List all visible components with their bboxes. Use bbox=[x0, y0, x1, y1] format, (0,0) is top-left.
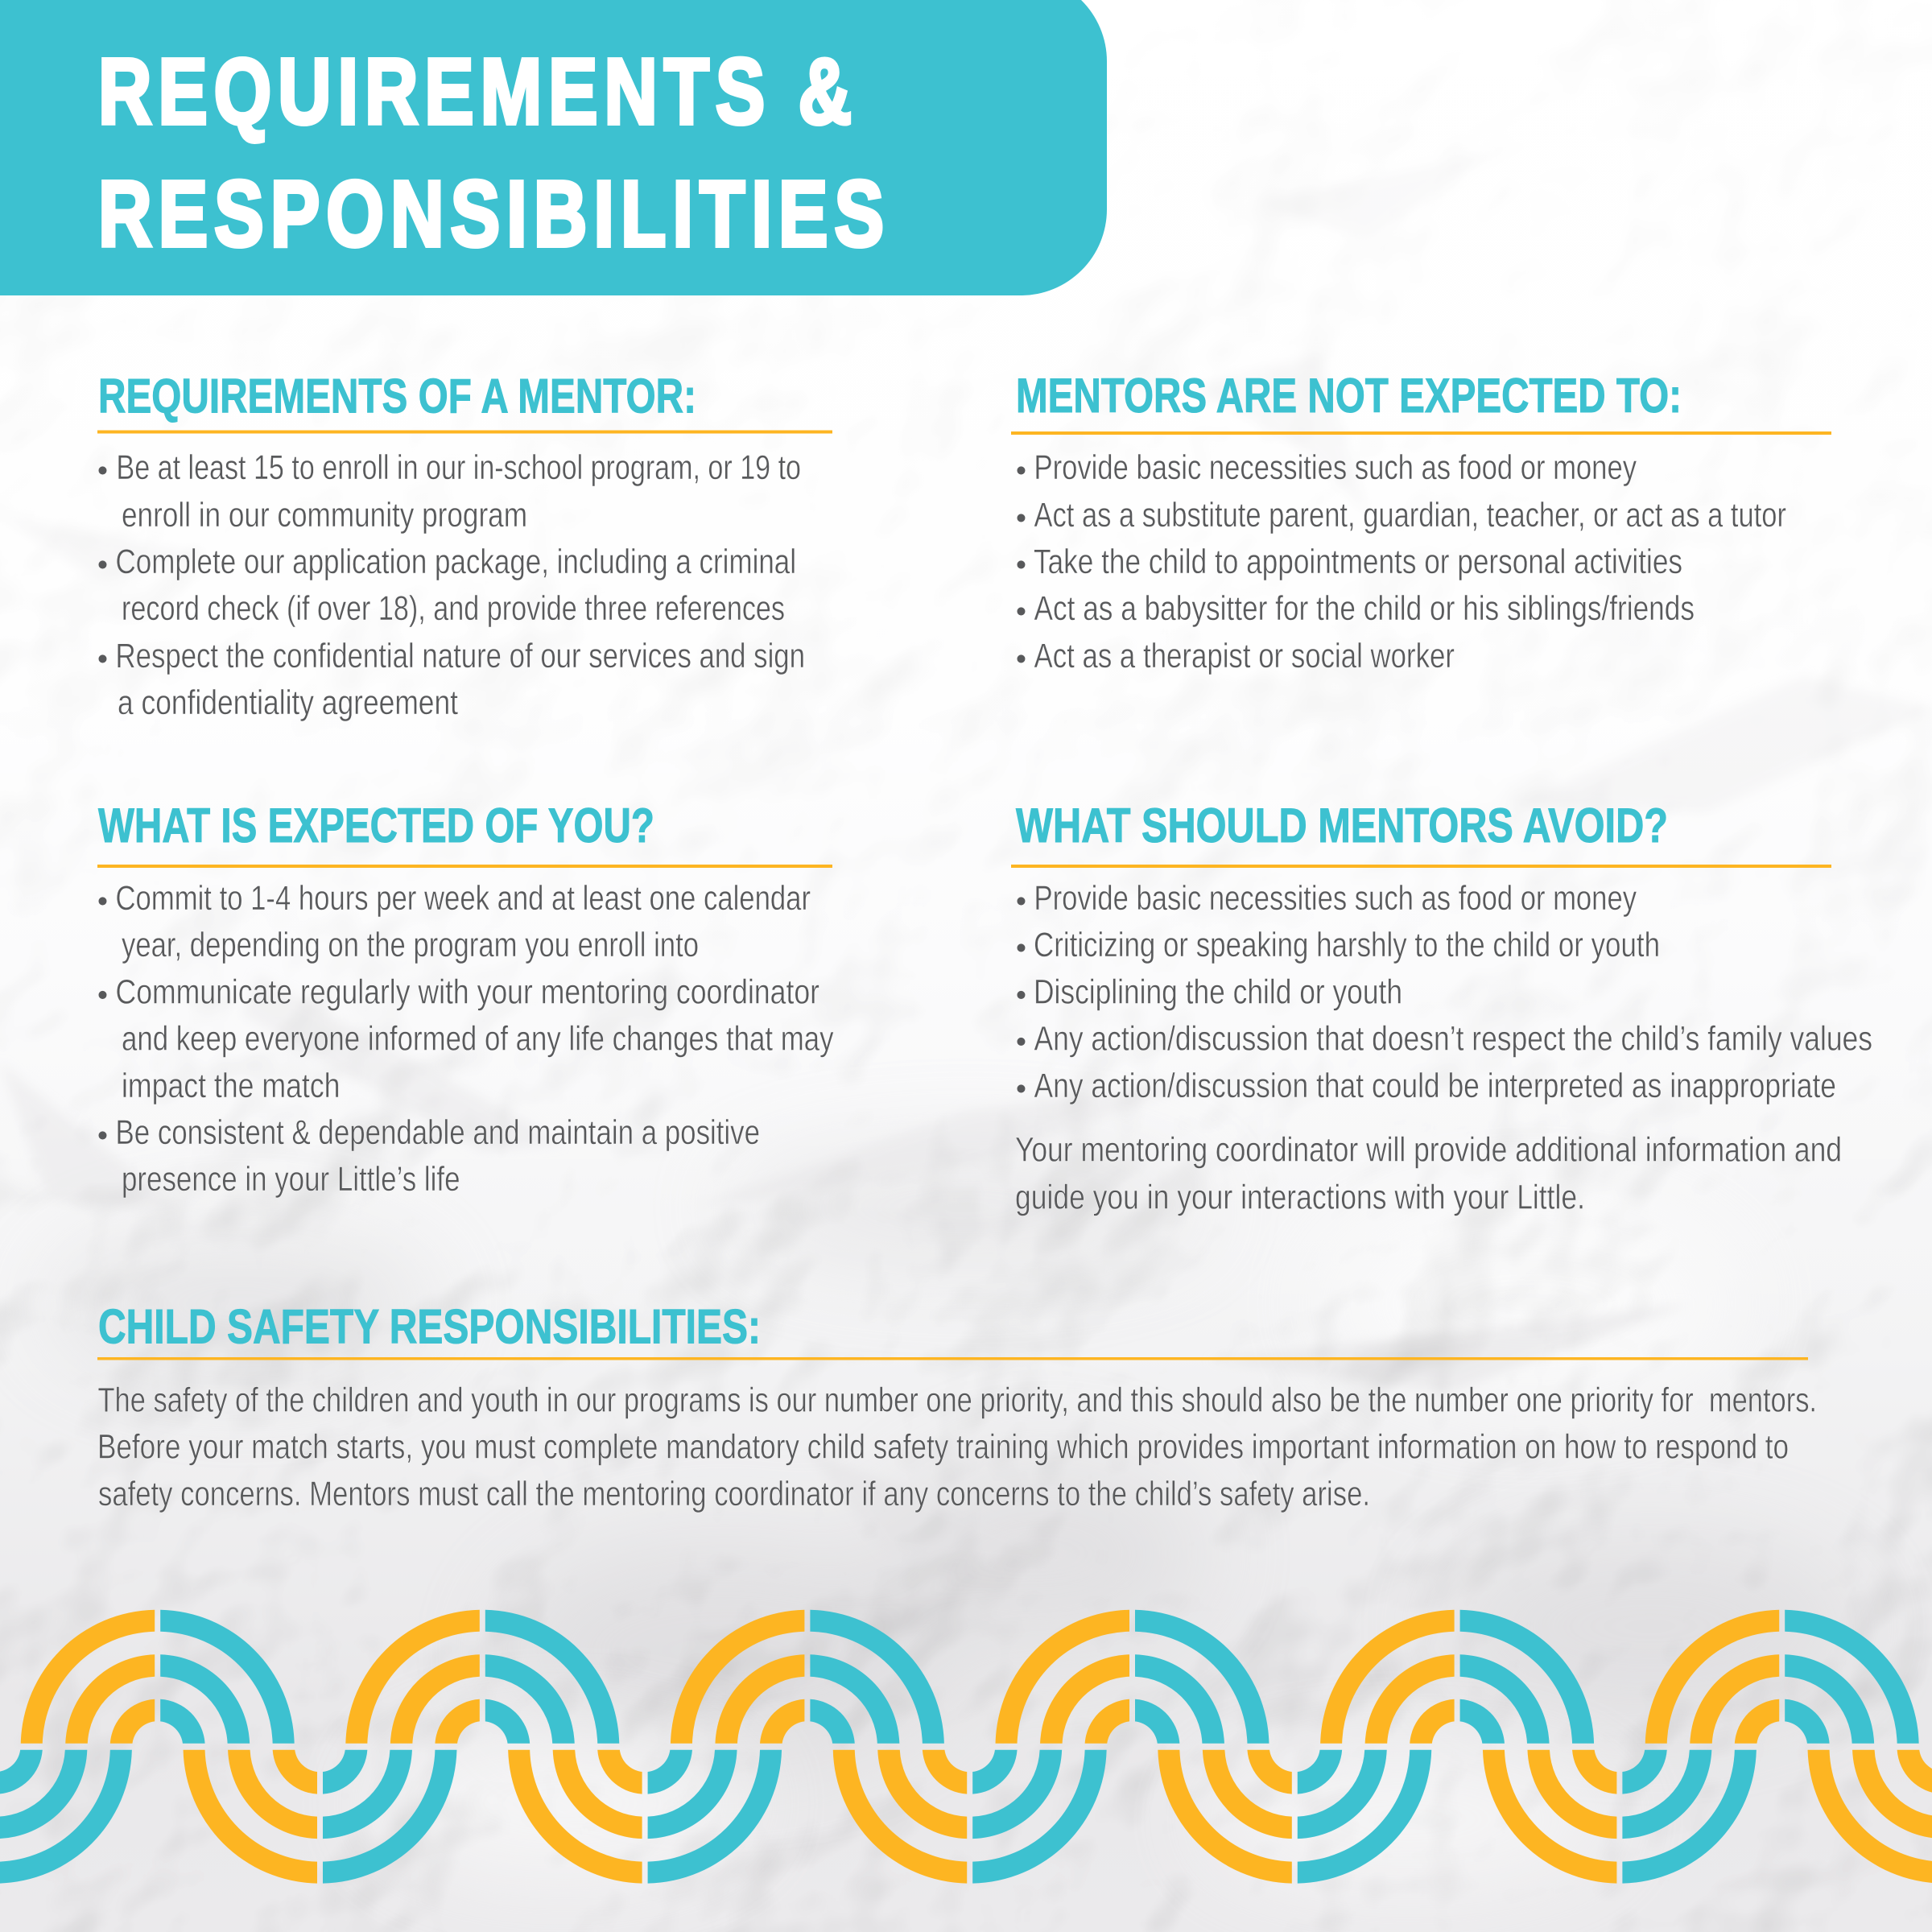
panel: what is expected of you bbox=[97, 799, 834, 1199]
list: not expected: • bbox=[1016, 454, 1026, 487]
list: mentor requirements: • bbox=[97, 454, 108, 487]
wave pattern: orange and teal arcs bbox=[0, 1610, 1932, 1884]
list: mentor requirements: Complete our application package, including a criminal bbox=[116, 543, 796, 581]
list: not expected: Act as a therapist or social worker bbox=[1034, 637, 1455, 675]
list: mentor requirements: Be at least 15 to enroll in our in-school program, or 19 to bbox=[116, 448, 801, 487]
closing note: guide you in your interactions with your Little. bbox=[1015, 1179, 1585, 1217]
list: things to avoid: Provide basic necessities such as food or money bbox=[1034, 879, 1637, 918]
list: mentor requirements: record check (if over 18), and provide three references bbox=[122, 589, 785, 628]
list: not expected: Provide basic necessities such as food or money bbox=[1034, 448, 1637, 487]
list: not expected: Take the child to appointments or personal activities bbox=[1034, 543, 1682, 581]
list: expectations bbox=[97, 879, 834, 1199]
list: expectations: presence in your Little’s life bbox=[122, 1160, 460, 1199]
panel: mentors are not expected to bbox=[1011, 369, 1831, 675]
list: expectations: • bbox=[97, 979, 108, 1011]
list: mentor requirements: a confidentiality agreement bbox=[118, 683, 458, 722]
heading: mentors are not expected to: MENTORS ARE NOT EXPECTED TO: bbox=[1016, 369, 1682, 423]
heading: what is expected of you: WHAT IS EXPECTED OF YOU? bbox=[98, 799, 654, 852]
list: things to avoid: • bbox=[1016, 931, 1026, 964]
panel: child safety responsibilities bbox=[97, 1299, 1817, 1513]
panel: what should mentors avoid bbox=[1011, 799, 1872, 1217]
heading: what should mentors avoid: WHAT SHOULD MENTORS AVOID? bbox=[1016, 799, 1668, 852]
paragraph: child safety bbox=[97, 1381, 1817, 1513]
list: mentor requirements: • bbox=[97, 642, 108, 675]
list: not expected: Act as a babysitter for the child or his siblings/friends bbox=[1034, 589, 1695, 628]
list: not expected: • bbox=[1016, 502, 1026, 535]
list: not expected: • bbox=[1016, 595, 1026, 628]
list: expectations: Communicate regularly with your mentoring coordinator bbox=[116, 972, 819, 1011]
panel: requirements of a mentor bbox=[97, 369, 832, 722]
heading: child safety responsibilities: CHILD SAFETY RESPONSIBILITIES: bbox=[98, 1299, 761, 1354]
list: things to avoid: Criticizing or speaking harshly to the child or youth bbox=[1034, 926, 1660, 964]
heading: requirements of a mentor: REQUIREMENTS OF A MENTOR: bbox=[98, 369, 696, 423]
list: mentor requirements: enroll in our community program bbox=[122, 496, 527, 535]
title bbox=[98, 39, 890, 266]
list: things to avoid: • bbox=[1016, 979, 1026, 1011]
list: expectations: and keep everyone informed of any life changes that may bbox=[122, 1019, 834, 1058]
paragraph: child safety: safety concerns. Mentors must call the mentoring coordinator if any concerns to the child’s safety arise. bbox=[98, 1475, 1370, 1513]
list: expectations: Commit to 1-4 hours per week and at least one calendar bbox=[116, 879, 811, 918]
list: mentor requirements: Respect the confidential nature of our services and sign bbox=[116, 637, 805, 675]
closing note bbox=[1015, 1130, 1842, 1217]
title banner bbox=[0, 0, 1107, 295]
list: not expected: • bbox=[1016, 548, 1026, 581]
list: expectations: • bbox=[97, 885, 108, 918]
list: expectations: impact the match bbox=[122, 1067, 340, 1105]
list: mentor requirements bbox=[97, 448, 805, 722]
list: mentor requirements: • bbox=[97, 548, 108, 581]
list: things to avoid: Disciplining the child or youth bbox=[1034, 972, 1402, 1011]
list: things to avoid: • bbox=[1016, 1072, 1026, 1105]
list: expectations: • bbox=[97, 1119, 108, 1152]
list: things to avoid: • bbox=[1016, 1026, 1026, 1058]
list: things to avoid: • bbox=[1016, 885, 1026, 918]
list: things to avoid bbox=[1016, 879, 1872, 1105]
list: expectations: Be consistent & dependable and maintain a positive bbox=[116, 1113, 760, 1152]
list: expectations: year, depending on the program you enroll into bbox=[122, 926, 699, 964]
banner shape bbox=[0, 0, 1107, 295]
list: not expected bbox=[1016, 448, 1786, 675]
title: REQUIREMENTS & bbox=[98, 39, 858, 143]
list: not expected: • bbox=[1016, 642, 1026, 675]
title: RESPONSIBILITIES bbox=[98, 161, 890, 266]
